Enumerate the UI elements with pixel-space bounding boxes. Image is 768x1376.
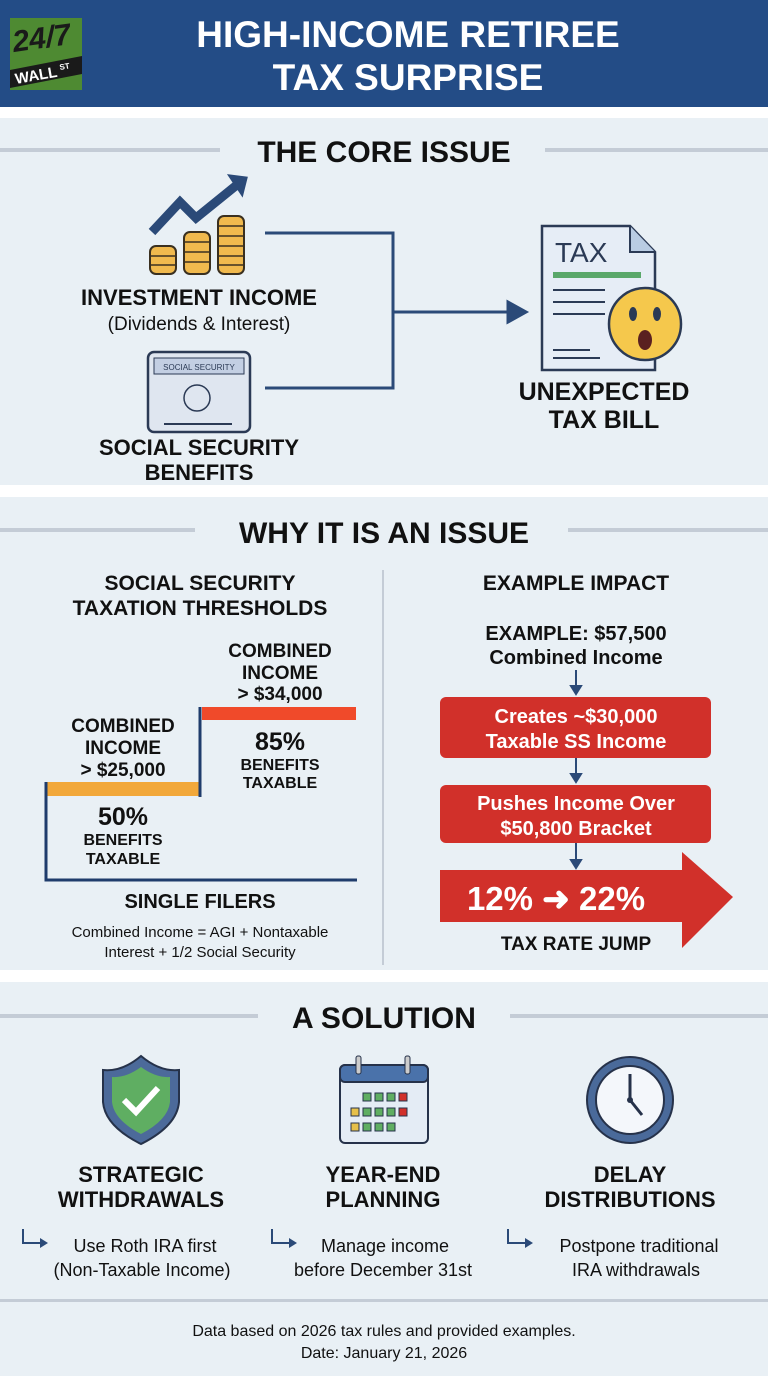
icon: clock bbox=[587, 1057, 673, 1143]
footer: Data based on 2026 tax rules and provided examples. bbox=[192, 1323, 576, 1340]
panel: a solution: (Non-Taxable Income) bbox=[53, 1260, 231, 1280]
arrow: connector bbox=[265, 233, 526, 388]
chart: thresholds: 50% bbox=[98, 803, 148, 831]
flow: example impact: Pushes Income Over bbox=[477, 793, 675, 815]
panel: core issue bbox=[0, 118, 768, 485]
chart: thresholds: TAXABLE bbox=[86, 851, 161, 868]
text: investment income: INVESTMENT INCOME bbox=[81, 285, 317, 310]
chart: thresholds: TAXABLE bbox=[243, 775, 318, 792]
heading: why it is an issue: WHY IT IS AN ISSUE bbox=[239, 517, 529, 550]
text: investment income: (Dividends & Interest) bbox=[108, 314, 290, 335]
text: social security benefits: BENEFITS bbox=[145, 460, 253, 485]
flow: example impact bbox=[440, 572, 733, 955]
chart: thresholds: Interest + 1/2 Social Security bbox=[104, 944, 296, 961]
text: solution items: DISTRIBUTIONS bbox=[544, 1187, 716, 1212]
icon: tax document with shocked face bbox=[542, 226, 681, 370]
text: unexpected tax bill: TAX BILL bbox=[549, 406, 659, 434]
footer: Date: January 21, 2026 bbox=[301, 1345, 467, 1362]
flow: example impact: Taxable SS Income bbox=[486, 731, 666, 753]
text: unexpected tax bill: UNEXPECTED bbox=[519, 378, 689, 406]
chart: thresholds: INCOME bbox=[85, 738, 161, 759]
header bar bbox=[0, 0, 768, 107]
icon: social security card bbox=[148, 352, 250, 432]
flow: example impact: Combined Income bbox=[489, 647, 663, 669]
chart: thresholds: SINGLE FILERS bbox=[124, 891, 276, 913]
chart: thresholds: TAXATION THRESHOLDS bbox=[73, 597, 327, 620]
panel: a solution bbox=[0, 982, 768, 1376]
chart: thresholds: BENEFITS bbox=[83, 832, 163, 849]
panel: a solution: Manage income bbox=[321, 1236, 449, 1256]
flow: example impact: Creates ~$30,000 bbox=[495, 706, 657, 728]
chart: thresholds: INCOME bbox=[242, 663, 318, 684]
logo bbox=[9, 18, 82, 90]
text: solution items: STRATEGIC bbox=[78, 1162, 204, 1187]
icon: shield bbox=[103, 1056, 179, 1144]
text: social security benefits bbox=[99, 435, 299, 485]
flow: example impact: TAX RATE JUMP bbox=[501, 934, 651, 955]
flow: example impact: 12% ➜ 22% bbox=[467, 880, 645, 917]
text: solution items: DELAY bbox=[594, 1162, 667, 1187]
heading: the core issue: THE CORE ISSUE bbox=[257, 136, 511, 169]
flow: example impact: EXAMPLE: $57,500 bbox=[485, 623, 667, 645]
panel: a solution: Use Roth IRA first bbox=[73, 1236, 217, 1256]
panel: a solution: before December 31st bbox=[294, 1260, 472, 1280]
chart: thresholds: SOCIAL SECURITY bbox=[105, 572, 295, 595]
flow: example impact: $50,800 Bracket bbox=[500, 818, 652, 840]
panel: a solution: IRA withdrawals bbox=[572, 1260, 700, 1280]
text: solution items bbox=[58, 1162, 716, 1212]
logo: WALL bbox=[14, 64, 59, 88]
heading: a solution: A SOLUTION bbox=[292, 1002, 476, 1035]
panel: why it is an issue bbox=[0, 497, 768, 970]
icon: coins with arrow bbox=[150, 176, 246, 274]
flow: example impact: EXAMPLE IMPACT bbox=[483, 572, 669, 595]
chart: thresholds: > $34,000 bbox=[237, 684, 323, 705]
logo: ST bbox=[59, 61, 71, 72]
chart: thresholds: COMBINED bbox=[71, 716, 175, 737]
chart: thresholds bbox=[46, 572, 357, 961]
text: social security benefits: SOCIAL SECURITY bbox=[99, 435, 299, 460]
chart: thresholds: > $25,000 bbox=[80, 760, 166, 781]
title bbox=[196, 14, 620, 98]
icon: tax document with shocked face: TAX bbox=[555, 237, 608, 268]
footer bbox=[192, 1323, 576, 1362]
chart: thresholds: Combined Income = AGI + Nontaxable bbox=[72, 924, 328, 941]
text: solution items: YEAR-END bbox=[326, 1162, 440, 1187]
text: unexpected tax bill bbox=[519, 378, 689, 434]
chart: thresholds: 85% bbox=[255, 728, 305, 756]
logo: 24/7 bbox=[9, 18, 74, 59]
icon: social security card: SOCIAL SECURITY bbox=[163, 363, 236, 372]
text: solution items: WITHDRAWALS bbox=[58, 1187, 224, 1212]
title: HIGH-INCOME RETIREE bbox=[196, 14, 620, 55]
text: solution items: PLANNING bbox=[326, 1187, 440, 1212]
chart: thresholds: COMBINED bbox=[228, 641, 332, 662]
icon: calendar bbox=[340, 1056, 428, 1143]
panel: a solution: Postpone traditional bbox=[559, 1236, 719, 1256]
text: investment income bbox=[81, 285, 317, 335]
title: TAX SURPRISE bbox=[273, 57, 543, 98]
chart: thresholds: BENEFITS bbox=[240, 757, 320, 774]
